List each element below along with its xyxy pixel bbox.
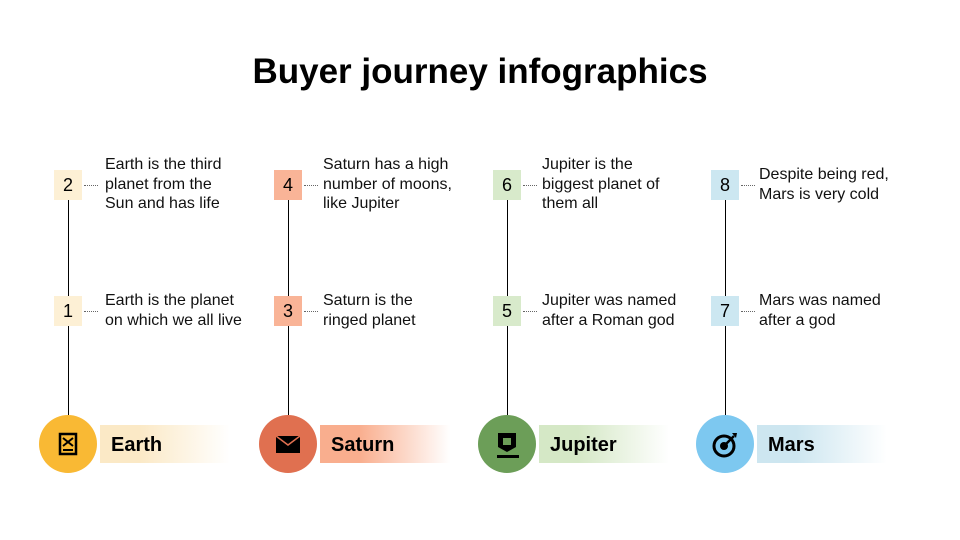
column: Saturn [259,156,452,473]
text 1: Earth is the planet [105,292,234,309]
column: Earth [39,156,242,473]
box 4: 4 [283,175,293,195]
text 2: Sun and has life [105,195,220,212]
box 1: 1 [63,301,73,321]
text 7: after a god [759,312,836,328]
text 4: Saturn has a high [323,156,448,173]
text 4 [323,156,452,212]
box 8: 8 [720,175,730,195]
label band Mars [757,425,887,463]
text 3: Saturn is the [323,292,413,309]
label band Earth: Earth [111,434,162,456]
text 4: number of moons, [323,176,452,192]
box 3: 3 [283,301,293,321]
label band Earth [100,425,230,463]
text 2 [105,156,222,212]
text 5: after a Roman god [542,312,675,328]
label band Mars: Mars [768,434,815,456]
box 2: 2 [63,175,73,195]
title: Buyer journey infographics [252,52,708,91]
label band Saturn [320,425,450,463]
text 6: biggest planet of [542,176,659,192]
text 8: Despite being red, [759,166,889,183]
text 7: Mars was named [759,292,881,309]
text 6 [542,156,660,212]
box 6 [493,170,521,200]
icon: Earth [39,415,97,473]
label band Jupiter: Jupiter [550,434,617,456]
box 8 [711,170,739,200]
icon: Jupiter [478,415,536,473]
text 5: Jupiter was named [542,292,676,309]
box 4 [274,170,302,200]
box 6: 6 [502,175,512,195]
icon: target [696,415,754,473]
box 7 [711,296,739,326]
column: Mars [696,166,889,473]
text 3: ringed planet [323,312,416,328]
label band Saturn: Saturn [331,434,394,456]
box 2 [54,170,82,200]
box 5 [493,296,521,326]
box 1 [54,296,82,326]
text 8: Mars is very cold [759,186,879,202]
text 7 [759,292,881,328]
text 3 [323,292,416,328]
text 4: like Jupiter [323,195,399,212]
text 6: Jupiter is the [542,156,633,173]
text 1 [105,292,242,328]
icon: envelope [259,415,317,473]
box 5: 5 [502,301,512,321]
label band Jupiter [539,425,669,463]
column: Jupiter [478,156,676,473]
text 5 [542,292,676,328]
text 2: Earth is the third [105,156,222,173]
text 1: on which we all live [105,312,242,328]
box 7: 7 [720,301,730,321]
text 6: them all [542,195,598,212]
box 3 [274,296,302,326]
text 8 [759,166,889,202]
text 2: planet from the [105,176,212,192]
